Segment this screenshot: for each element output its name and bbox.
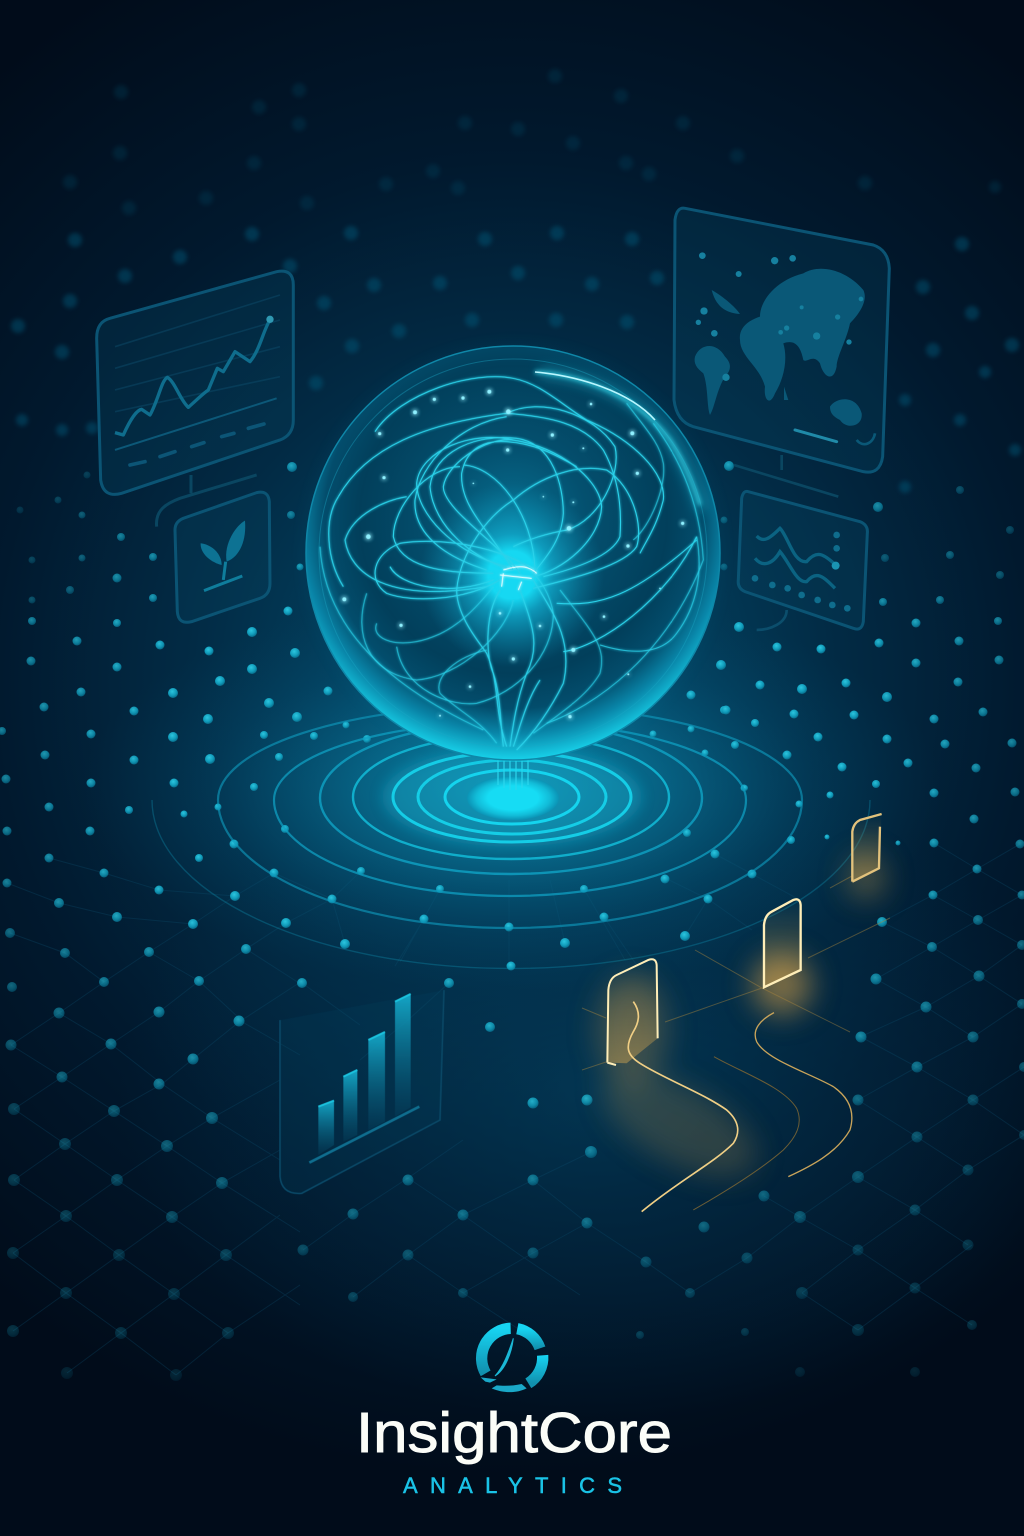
brand name: InsightCore [356,1401,672,1465]
light stream into pad [498,745,528,790]
logo mark [481,1328,543,1392]
highlight arc [540,372,702,510]
sphere core glow [420,483,604,667]
data point grid [0,461,1024,1381]
gold portal: door 1 and path [607,959,738,1212]
concentric rings under the sphere [152,705,870,968]
gold portal: door 2 and path [693,899,852,1210]
panel: line chart [97,271,293,527]
panel: bar chart [280,990,444,1193]
lattice lines on the floor [7,843,1024,1375]
sparkles [342,390,684,718]
panel: plant icon [175,492,270,622]
light strands [320,377,703,750]
world map continents [695,269,865,426]
panel: world map [674,208,889,497]
central glowing pad [467,776,559,820]
data sphere [291,331,735,775]
gold portal: door 3 [852,814,882,882]
panel: wave chart [738,491,867,630]
radial floor glow [82,590,942,990]
icon: sprout [201,521,245,591]
faint upper data particles [11,69,1021,493]
bars [318,994,411,1155]
map data points [696,252,863,381]
brand tagline: ANALYTICS [403,1473,622,1498]
lower background glow [120,760,1024,1420]
gold portal glows [587,856,886,1198]
gold grid lines [582,876,890,1070]
